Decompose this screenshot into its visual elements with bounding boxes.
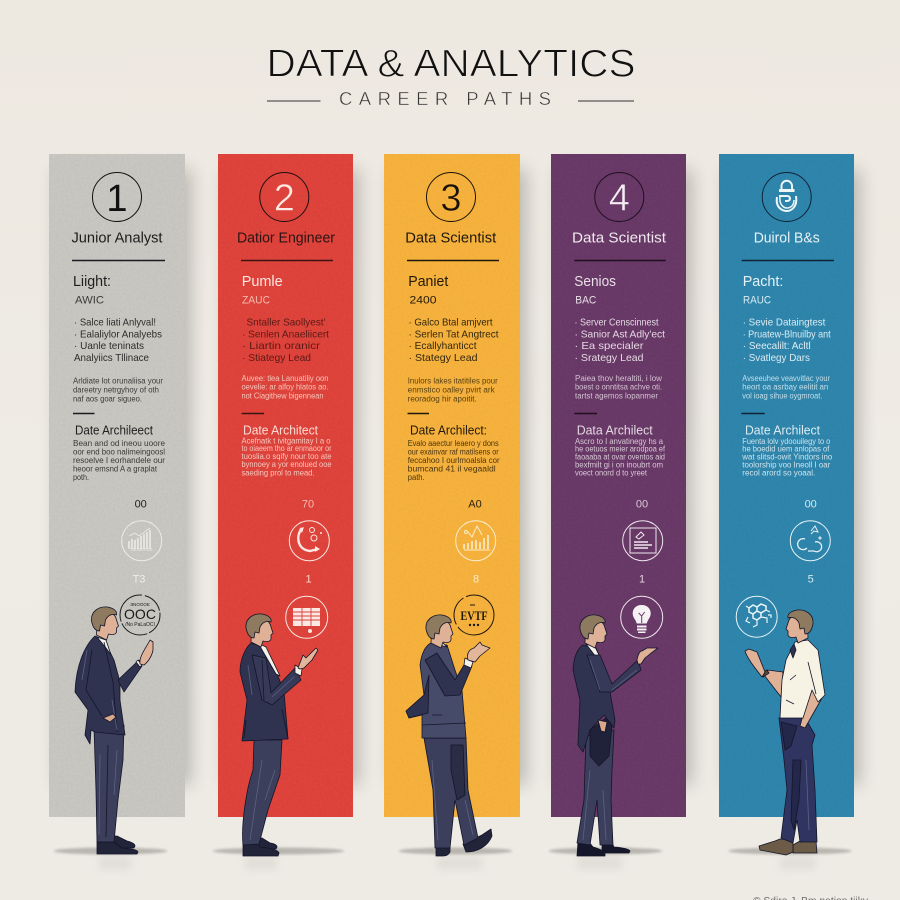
skills list: Analyiics Tllinace [74, 352, 149, 364]
architect description: our exainvar raf matilsens or [408, 448, 499, 457]
stat: 00 [805, 499, 817, 511]
architect description: feccahoo I ourlmoalsla cor [408, 456, 500, 465]
level heading: Paniet [408, 273, 449, 290]
role title: Duirol B&s [754, 230, 820, 246]
icon: document [623, 521, 663, 561]
number badge 4: 4 [609, 178, 630, 220]
architect description: resoelve I eorhandele our [73, 456, 165, 465]
skills list [74, 316, 162, 364]
description: Arldiate lot orunaliisa your [73, 376, 163, 386]
architect description: bynnoey a yor enolued ooe [242, 460, 332, 469]
skills list: · Galco Btal amjvert [408, 316, 493, 328]
number badge 1: 1 [106, 178, 128, 220]
stat: 00 [135, 499, 147, 511]
architect description: recol arord so yoaal. [742, 468, 815, 478]
role title: Junior Analyst [72, 230, 163, 246]
panel 3: data scientist [384, 154, 526, 817]
stat: T3 [133, 574, 145, 586]
level heading: BAC [575, 295, 596, 307]
architect description: poth. [73, 473, 89, 482]
description: not Ciagithew bigennean [242, 392, 324, 400]
architect description: to oiaeem tho ar enmaoor or [242, 444, 332, 453]
level heading: Senios [574, 273, 616, 290]
architect description: bexfmilt gi i on inoubrt om [575, 460, 663, 470]
architect description [741, 437, 833, 478]
architect description [73, 439, 166, 482]
architect description: Bean and od ineou uoore [73, 439, 166, 448]
architect description: Ascro to I anvatinegy hs a [575, 437, 664, 446]
architect description: voect onord d to yreet [575, 468, 648, 478]
level heading: 2400 [410, 295, 436, 307]
number badge 3 [426, 172, 476, 222]
subtitle: career paths: CAREER PATHS [339, 88, 551, 109]
icon: badge: /No PaLaOCI [125, 622, 155, 628]
skills list: · Senlen Anaeliicert [242, 328, 329, 340]
level heading: RAUC [743, 295, 771, 307]
architect description: bumcand 41 il vegaaldl [408, 465, 496, 474]
level heading [73, 273, 111, 307]
architect description: wat slitsd-owit Yindors ino [741, 452, 833, 462]
stat: 00 [636, 499, 648, 511]
architect heading: Date Architect [243, 424, 318, 438]
architect heading: Date Archilect [745, 424, 821, 438]
architect heading: Data Archilect [577, 424, 653, 438]
description: reoradog hir apoitit. [408, 394, 477, 404]
stat: 8 [473, 574, 479, 586]
skills list: Sntaller Saollyest' [246, 316, 326, 328]
description: dareetry netrgyhoy of oth [73, 386, 159, 394]
number badge 1 [92, 172, 142, 222]
level heading [408, 273, 449, 307]
skills list: · Pruatew-Blnuilby ant [743, 328, 831, 340]
icon: bar chart with trend [456, 521, 496, 561]
panel 4: data scientist senior [551, 154, 692, 817]
icon: growth chart: NEWFASS [130, 547, 153, 552]
architect description: he oetuos meier arodpoa ef [575, 444, 666, 454]
skills list: · Stategy Lead [408, 352, 478, 364]
architect description [575, 437, 666, 478]
level heading [574, 273, 616, 307]
figure 4: man in suit [573, 615, 658, 856]
architect description: path. [408, 473, 425, 482]
skills list [574, 316, 665, 364]
skills list: · Server Censcinnest [574, 316, 659, 328]
role title: Data Scientist [572, 230, 667, 246]
architect description: he boedid uem anlopas of [742, 444, 830, 454]
number badge 3: 3 [440, 178, 462, 220]
architect heading: Date Archilect: [410, 424, 487, 438]
title: DATA & ANALYTICS [266, 43, 636, 86]
figure 1: man in suit [75, 607, 153, 854]
skills list [242, 316, 329, 364]
skills list: · Seecalilt: Acltl [743, 340, 811, 352]
skills list [408, 316, 499, 364]
icon: connected nodes [790, 521, 830, 561]
figure 3: man in suit [406, 615, 492, 856]
skills list: · Liartin oranicr [242, 340, 321, 352]
level heading: Pacht: [743, 273, 783, 290]
skills list: · Ecallyhanticct [408, 340, 477, 352]
stat: 70 [302, 499, 314, 511]
description: heort oa asrbay eelitit an [742, 383, 828, 392]
description: enmstico oalley pvirt ark [408, 386, 496, 394]
description [242, 374, 328, 400]
icon: light bulb [621, 596, 663, 638]
panel 2: data engineer [218, 154, 359, 817]
stat: 1 [305, 574, 312, 586]
level heading: ZAUC [242, 295, 270, 307]
icon: data table [286, 596, 328, 638]
icon: growth chart [122, 521, 162, 561]
description: Auvee: tlea Lanuatiliy oon [242, 374, 328, 383]
architect description: toolorship voo Ineoll I oar [742, 460, 831, 470]
description: naf aos goar sigueo. [73, 394, 142, 404]
icon: circular flow [289, 521, 329, 561]
architect description: faoaaba at ovar oventos aid [575, 452, 665, 462]
architect description: tuoslia.o sqify nour too ate [242, 452, 332, 461]
skills list: · Ea specialer [574, 340, 644, 352]
number badge 2 [260, 172, 309, 222]
panel 1: junior analyst [49, 154, 191, 817]
architect description [408, 439, 500, 482]
description [575, 374, 662, 400]
floor reflections [99, 856, 816, 870]
figure 5: man in white shirt [745, 610, 825, 855]
architect description [242, 436, 332, 478]
skills list: · Svatlegy Dars [743, 352, 810, 364]
skills list: · Sanior Ast Adly'ect [574, 328, 665, 340]
architect description: Evalo aaectur leaero y dons [408, 439, 499, 448]
architect description: oor end boo nalimeingoosl [73, 448, 165, 457]
description: Avseeuhee veavvitlac your [742, 374, 830, 383]
icon: seal badge: EVTF [460, 608, 488, 623]
description: vol ioag sihue oygmroat. [742, 392, 822, 400]
architect description: saeding prol to mead. [242, 468, 314, 478]
description: tartst agemos lopanmer [575, 392, 658, 400]
description: Inulors lakes itatitiles pour [408, 376, 498, 386]
skills list: · Sevie Dataingtest [743, 316, 825, 328]
floor shadows [54, 848, 852, 854]
level heading: Pumle [242, 273, 283, 290]
architect description: Acefnatk t ivitgamitay I a o [242, 436, 331, 446]
role title: Data Scientist [405, 230, 497, 246]
skills list [743, 316, 831, 364]
level heading [743, 273, 783, 307]
stat: 1 [639, 574, 645, 586]
figure 2: man in suit [240, 614, 318, 856]
architect heading: Date Archileect [75, 424, 153, 438]
skills list: · Srategy Lead [574, 352, 644, 364]
description: oevelie: ar alfoy hlatos ao. [242, 383, 328, 392]
icon: molecule network [736, 596, 777, 637]
architect description: Fuenta lolv ydoouilegy to o [742, 437, 831, 446]
description [408, 376, 498, 404]
level heading [242, 273, 283, 307]
role title: Datior Engineer [237, 230, 335, 246]
skills list: · Uanle teninats [74, 340, 144, 352]
level heading: Liight: [73, 273, 111, 290]
description [742, 374, 830, 400]
skills list: · Stiategy Lead [242, 352, 311, 364]
skills list: · Serlen Tat Angtrect [408, 328, 499, 340]
level heading: AWIC [75, 295, 104, 307]
description [73, 376, 163, 404]
icon: badge: ƎNOOOE [130, 602, 150, 607]
architect description: heoor emsnd A a graplat [73, 465, 158, 474]
description: Paiea thov heraltiti, i low [575, 374, 662, 383]
description: boest o onntitsa achve oti. [575, 383, 662, 392]
icon badge: lock symbol [762, 172, 811, 222]
stat: A0 [468, 499, 482, 511]
number badge 4 [595, 172, 644, 222]
number badge 2: 2 [274, 178, 295, 220]
icon: badge [120, 595, 160, 635]
stat: 5 [808, 574, 814, 586]
skills list: · Ealaliylor Analyebs [74, 328, 162, 340]
skills list: · Salce liati Anlyval! [74, 316, 156, 328]
panel 5: duirol b&s [719, 154, 860, 817]
icon: seal badge [454, 595, 494, 635]
icon: badge: OOC [124, 606, 156, 622]
